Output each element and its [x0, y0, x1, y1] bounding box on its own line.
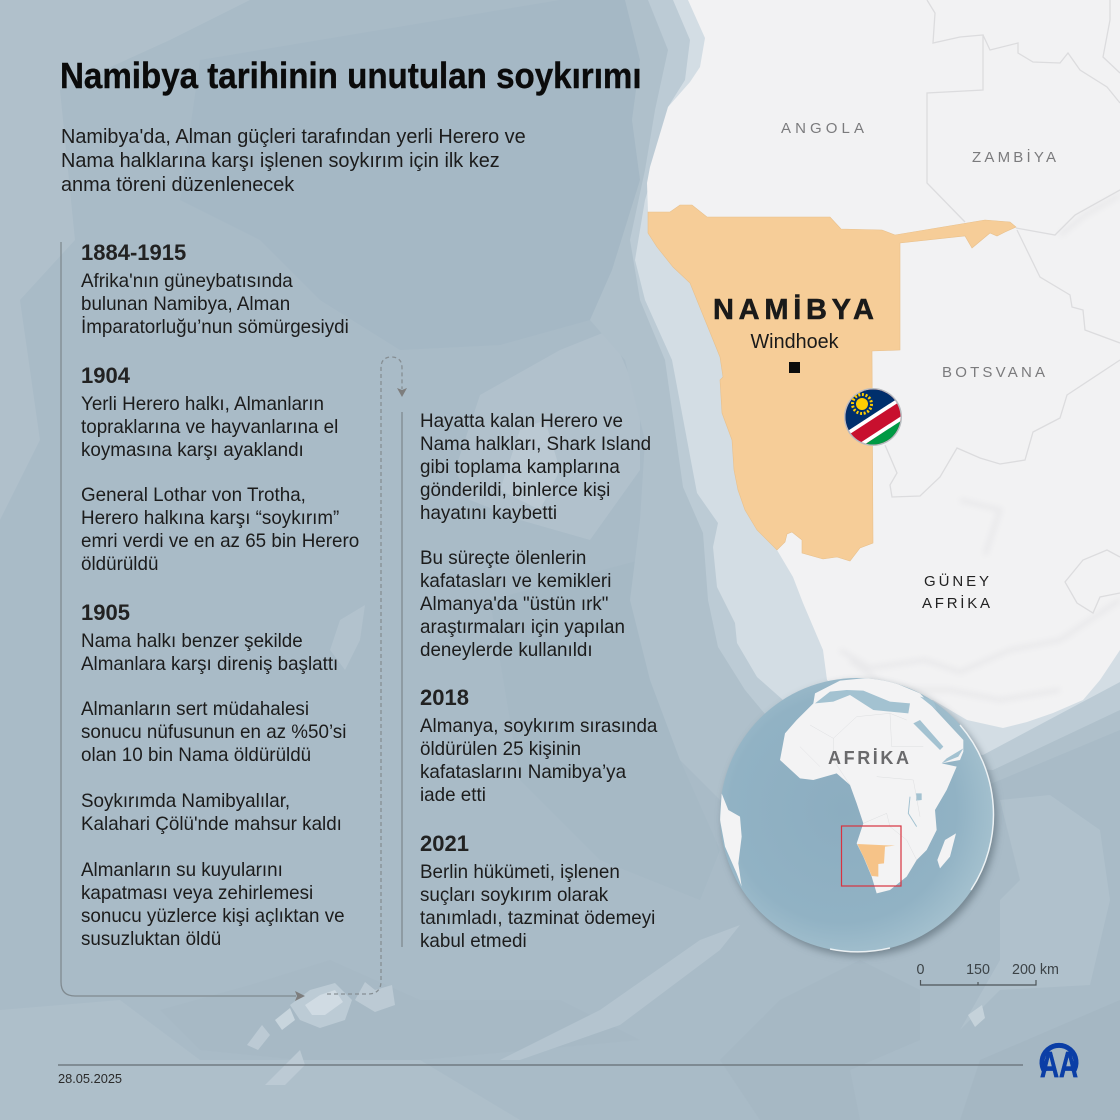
timeline arrow: solid left line [61, 242, 305, 1001]
text: Herero uprising: koymasına karşı ayaklandı [81, 439, 304, 461]
text: wells: kapatması veya zehirlemesi [81, 882, 313, 904]
text: Kalahari: Kalahari Çölü'nde mahsur kaldı [81, 813, 342, 835]
text: Nama deaths: sonucu nüfusunun en az %50’si [81, 721, 346, 743]
footer rule [58, 1064, 1023, 1066]
text: 2021: kabul etmedi [420, 930, 527, 952]
intro text: Nama halklarına karşı işlenen soykırım için ilk kez [61, 149, 500, 172]
text: von Trotha order: Herero halkına karşı “soykırım” [81, 507, 339, 529]
flag of Namibia [844, 388, 902, 446]
timeline arrow: dashed connector [327, 357, 407, 994]
label: ZAMBİYA: ZAMBİYA [972, 148, 1056, 166]
text: wells [81, 859, 345, 950]
text: 2021: Berlin hükümeti, işlenen [420, 861, 620, 883]
text: Kalahari: Soykırımda Namibyalılar, [81, 790, 290, 812]
text: 2018: kafataslarını Namibya’ya [420, 761, 626, 783]
text: Nama deaths: olan 10 bin Nama öldürüldü [81, 744, 311, 766]
text: skulls: Bu süreçte ölenlerin [420, 547, 586, 569]
text: skulls: deneylerde kullanıldı [420, 639, 593, 661]
heading: 2018: 2018 [420, 685, 469, 710]
text: von Trotha order: General Lothar von Trotha, [81, 484, 306, 506]
text: 2018: Almanya, soykırım sırasında [420, 715, 657, 737]
Namibia country shape [648, 205, 1016, 561]
text: skulls: Almanya'da "üstün ırk" [420, 593, 608, 615]
label: GÜNEY AFRİKA: GÜNEY [924, 572, 989, 590]
heading: 1884-1915: 1884-1915 [81, 240, 186, 265]
intro text: Namibya'da, Alman güçleri tarafından yerli Herero ve [61, 125, 526, 148]
text: Nama deaths: Almanların sert müdahalesi [81, 698, 309, 720]
land: southern Africa [647, 0, 1120, 728]
intro text: anma töreni düzenlenecek [61, 173, 294, 196]
label: AFRİKA: AFRİKA [828, 748, 909, 768]
text: 2018: öldürülen 25 kişinin [420, 738, 581, 760]
text: camps: gönderildi, binlerce kişi [420, 479, 610, 501]
map scale bar: 200 km [1012, 962, 1059, 978]
label: GÜNEY AFRİKA [922, 572, 990, 612]
text: 2021: tanımladı, tazminat ödemeyi [420, 907, 655, 929]
label: BOTSVANA: BOTSVANA [942, 364, 1045, 381]
text: Herero uprising: topraklarına ve hayvanlarına el [81, 416, 338, 438]
text: von Trotha order: öldürüldü [81, 553, 158, 575]
text: Herero uprising: Yerli Herero halkı, Almanların [81, 393, 324, 415]
text: camps: Hayatta kalan Herero ve [420, 410, 623, 432]
sea: coastal shelf bands [590, 0, 1120, 815]
text: Kalahari [81, 790, 342, 835]
text: Nama resistance: Almanlara karşı direniş başlattı [81, 653, 338, 675]
text: camps: gibi toplama kamplarına [420, 456, 620, 478]
label: GÜNEY AFRİKA: AFRİKA [922, 594, 990, 612]
heading: 1904: 1904 [81, 363, 130, 388]
text: 2018 [420, 715, 658, 806]
intro text [61, 125, 526, 196]
locator rectangle [842, 826, 901, 886]
map scale bar: 0 [917, 962, 925, 978]
date: 28.05.2025 [58, 1071, 122, 1086]
title: Namibya tarihinin unutulan soykırımı [60, 55, 642, 96]
text: Nama resistance: Nama halkı benzer şekilde [81, 630, 303, 652]
text: wells: sonucu yüzlerce kişi açlıktan ve [81, 905, 345, 927]
text: von Trotha order [81, 484, 359, 575]
heading: 1905: 1905 [81, 600, 130, 625]
heading: 2021: 2021 [420, 831, 469, 856]
text: 1884-1915: İmparatorluğu’nun sömürgesiydi [81, 316, 349, 338]
text: 2021: suçları soykırım olarak [420, 884, 608, 906]
label: ANGOLA: ANGOLA [781, 120, 864, 137]
label: Windhoek: Windhoek [750, 331, 839, 353]
map scale bar [917, 962, 1059, 985]
text: camps [420, 410, 651, 524]
text: 2018: iade etti [420, 784, 486, 806]
AA logo: AA [1040, 1044, 1078, 1085]
label: NAMİBYA: NAMİBYA [713, 294, 874, 326]
country borders [885, 0, 1120, 613]
text: 1884-1915: Afrika'nın güneybatısında [81, 270, 293, 292]
map scale bar: 150 [966, 962, 990, 978]
text: Nama resistance [81, 630, 338, 675]
text: skulls [420, 547, 625, 661]
text: Herero uprising [81, 393, 338, 461]
text: camps: hayatını kaybetti [420, 502, 557, 524]
text: 2021 [420, 861, 655, 952]
text: camps: Nama halkları, Shark Island [420, 433, 651, 455]
text: 1884-1915: bulunan Namibya, Alman [81, 293, 290, 315]
text: Nama deaths [81, 698, 346, 766]
text: skulls: kafatasları ve kemikleri [420, 570, 611, 592]
text: 1884-1915 [81, 270, 349, 338]
capital marker: Windhoek [789, 362, 800, 373]
locator globe [720, 677, 997, 956]
text: von Trotha order: emri verdi ve en az 65 bin Herero [81, 530, 359, 552]
right column rule [401, 412, 403, 947]
text: wells: Almanların su kuyularını [81, 859, 283, 881]
text: skulls: araştırmaları için yapılan [420, 616, 625, 638]
text: wells: susuzluktan öldü [81, 928, 221, 950]
